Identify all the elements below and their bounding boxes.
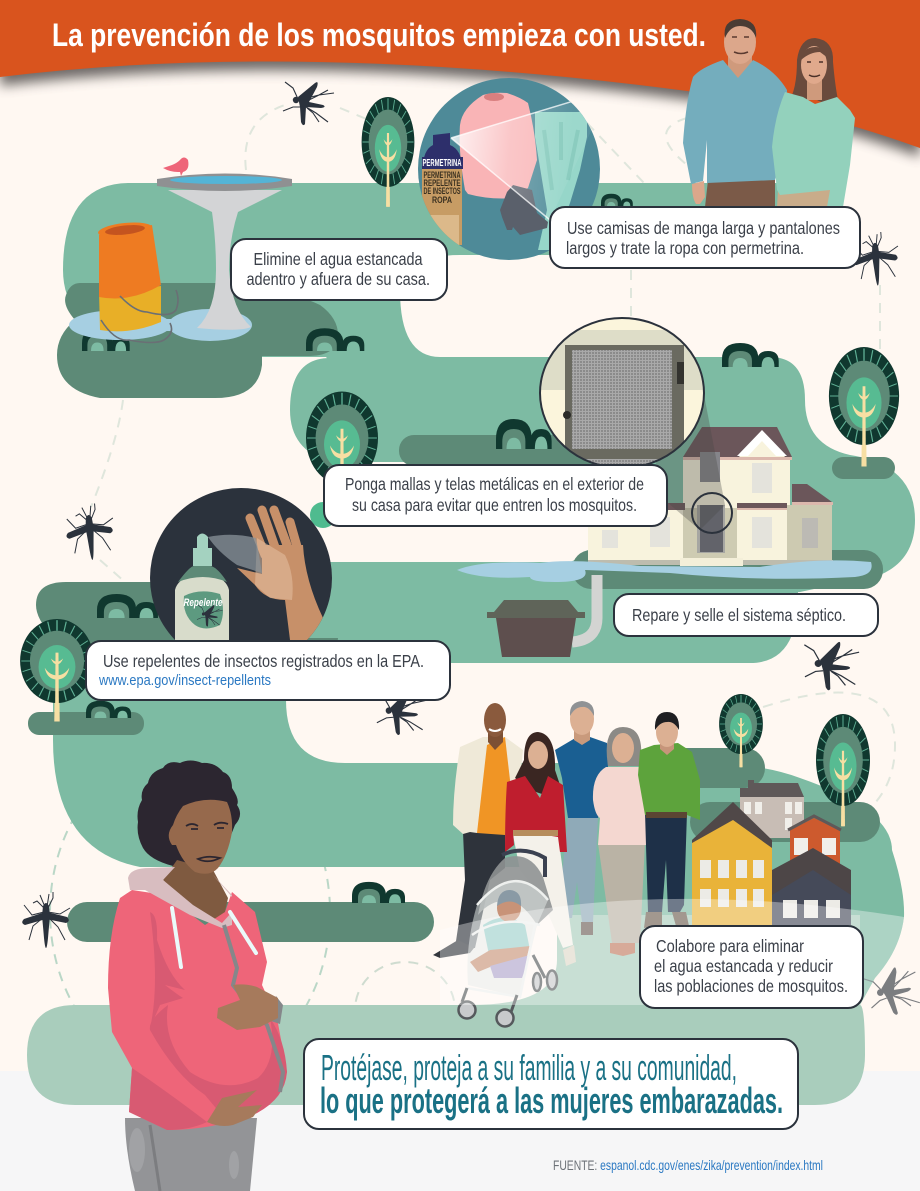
man in blue sweater [555, 701, 608, 935]
bottle label [184, 591, 223, 628]
jeans [535, 112, 587, 250]
spray mist [208, 535, 262, 573]
drawstrings [172, 908, 256, 967]
callout: septic [614, 594, 878, 636]
woman [772, 38, 855, 207]
clothing circle illustration [418, 78, 610, 260]
hoodie sleeve fold [150, 912, 185, 1028]
septic tank [487, 600, 585, 657]
translucent foreground overlay [440, 899, 904, 1005]
community group [433, 701, 700, 1026]
bucket illustration [97, 220, 178, 342]
upper hand [217, 984, 278, 1030]
green winding path: top band [63, 183, 800, 362]
bird [163, 158, 188, 176]
callout: screens: Ponga mallas y telas metálicas en el exterior de [345, 474, 644, 494]
repellent circle illustration [150, 488, 332, 640]
upper sleeve cuff [268, 996, 283, 1024]
light green final band [27, 915, 865, 1105]
hoodie belly shade [150, 1005, 287, 1125]
emerald patch beside callout [310, 502, 336, 528]
door magnifier ring [692, 493, 732, 533]
green winding path: house band [290, 290, 915, 592]
title: La prevención de los mosquitos empieza con usted. [52, 17, 706, 53]
hoodie [108, 890, 287, 1130]
pants [125, 1118, 257, 1191]
couple illustration [683, 19, 855, 207]
callout: standing water [231, 239, 447, 300]
hoodie hem shade [129, 1068, 207, 1130]
man in orange shirt [433, 703, 523, 958]
bushes [82, 194, 779, 903]
right wing shade [787, 505, 832, 560]
woman with grey hair [593, 727, 655, 956]
woman in red top [505, 732, 576, 966]
orange house [788, 816, 841, 870]
callout: repellent [86, 641, 450, 700]
man [683, 19, 787, 207]
back house [740, 780, 804, 838]
dark green hill: left [36, 582, 338, 652]
callout: repellent: Use repelentes de insectos registrados en la EPA. [103, 651, 424, 671]
walls [588, 457, 832, 560]
bottom grey band [0, 1071, 920, 1191]
hair [138, 760, 240, 866]
roof trim [683, 457, 833, 510]
dark green hill: right [832, 457, 895, 479]
face [169, 800, 232, 874]
house illustration [588, 400, 833, 566]
dark green hill: under house [572, 550, 883, 589]
sweater collar [484, 93, 504, 101]
spray can [422, 168, 462, 245]
bath stem [168, 190, 282, 330]
steps [680, 558, 743, 566]
callout: community [640, 926, 863, 1008]
facial features [186, 823, 228, 861]
callout: clothing: Use camisas de manga larga y pantalones [567, 218, 840, 238]
bottle [175, 577, 229, 640]
septic pipe [572, 575, 597, 642]
callout: community: las poblaciones de mosquitos. [654, 976, 848, 996]
plinth [588, 560, 833, 565]
dark green hill: middle [399, 435, 599, 466]
bird bath illustration [69, 158, 292, 341]
dark green hill: village front [690, 802, 880, 842]
callout: screens: su casa para evitar que entren los mosquitos. [352, 495, 637, 515]
boots [500, 185, 548, 235]
dark green hill: top left [57, 283, 338, 398]
hand [237, 510, 323, 640]
entry shade [683, 508, 737, 560]
clothing circle illustration: PERMETRINA [424, 170, 461, 180]
can label text: PERMETRINA [422, 158, 462, 169]
lower hand [207, 1090, 262, 1126]
man in green shirt [638, 712, 700, 928]
callout: clothing [550, 207, 860, 268]
spray cone [451, 102, 591, 218]
hood collar [128, 867, 232, 928]
clothing circle illustration: DE INSECTOS [424, 186, 460, 196]
clothing circle illustration: REPELENTE [424, 178, 460, 188]
callout: screens [324, 465, 667, 526]
neck [163, 860, 228, 925]
clothing circle illustration: ROPA [432, 195, 452, 205]
village houses [692, 780, 851, 925]
callout: clothing: largos y trate la ropa con permetrina. [566, 238, 804, 258]
windows [602, 463, 772, 548]
callout: standing water: Elimine el agua estancada [254, 249, 423, 269]
callout: repellent: www.epa.gov/insect-repellents [98, 672, 271, 689]
callout: community: el agua estancada y reducir [654, 956, 833, 976]
dark house [772, 848, 851, 925]
yellow house [692, 802, 772, 925]
main roof [683, 427, 792, 457]
screen door circle [540, 318, 704, 470]
mosquitoes [22, 82, 920, 1022]
pregnant woman illustration [108, 760, 287, 1191]
orange header band [0, 0, 920, 148]
callout: community: Colabore para eliminar [656, 936, 804, 956]
callout: standing water: adentro y afuera de su casa. [246, 269, 430, 289]
zipper [224, 925, 283, 1092]
dark green hill: lower centre [67, 902, 434, 942]
pink sweater [460, 93, 537, 198]
palm highlight [255, 538, 293, 600]
trees [20, 97, 899, 826]
dark green hill: village back [665, 748, 765, 788]
stroller [458, 851, 557, 1026]
stroller wheels [458, 970, 557, 1026]
callout: septic: Repare y selle el sistema séptico. [632, 605, 846, 625]
magnifier shadow [655, 400, 725, 530]
source line: FUENTE: espanol.cdc.gov/enes/zika/prevention/index.html [553, 1157, 823, 1173]
orange header shadow [0, 9, 920, 157]
bath water [170, 176, 282, 184]
bath rim [157, 174, 292, 191]
dark green hill: small left [28, 712, 144, 735]
wing roof [792, 484, 832, 502]
dashed flight paths [50, 105, 895, 1080]
callout: main message [304, 1039, 798, 1129]
repellent circle illustration: Repelente [184, 597, 222, 609]
upper window and door [700, 452, 720, 482]
gable [738, 432, 786, 458]
puddle [69, 309, 252, 341]
water around house [457, 560, 872, 582]
green winding path: lower band [53, 530, 904, 1005]
mosquito on label [197, 605, 222, 627]
